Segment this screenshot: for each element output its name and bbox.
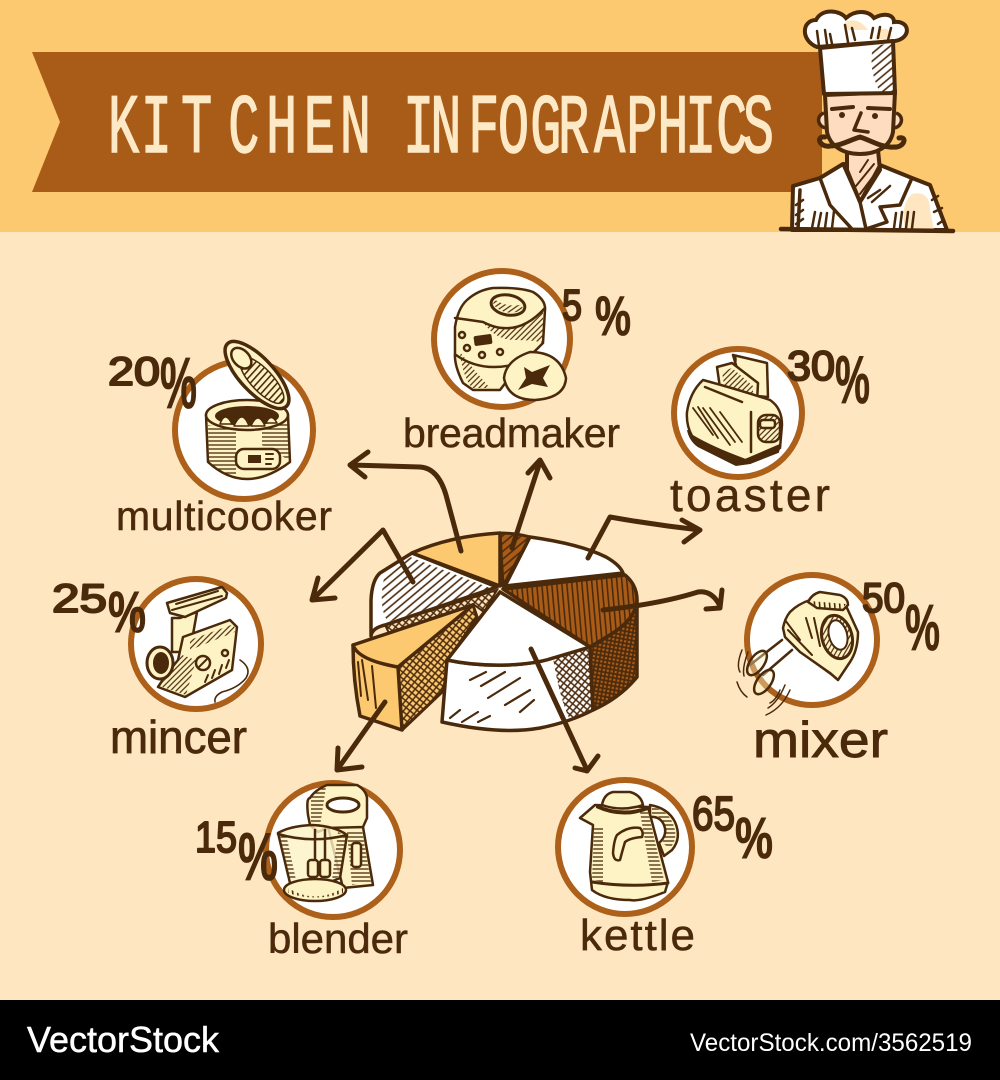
title ribbon xyxy=(32,52,822,192)
pie side: right dark xyxy=(590,600,637,710)
percent: 30%: % xyxy=(835,342,870,418)
chef baseline xyxy=(781,229,953,231)
pie side strokes xyxy=(450,672,534,722)
ring xyxy=(175,361,313,499)
pie small brown hatch xyxy=(500,533,530,586)
percent: 15%: % xyxy=(238,819,278,895)
icon: multicooker xyxy=(206,332,299,479)
percent: 65% xyxy=(692,788,773,871)
chef neck hatching xyxy=(856,160,878,194)
pie pulled piece side right xyxy=(398,605,477,730)
pie side hatching xyxy=(553,647,593,720)
pie side dark hatching xyxy=(590,600,637,710)
chef face xyxy=(825,92,895,154)
chef hat shading xyxy=(845,20,892,40)
pie slice hatching xyxy=(382,557,490,622)
ring xyxy=(131,579,261,709)
chef neck xyxy=(847,150,880,202)
pie inner gap xyxy=(385,590,497,635)
icon: mincer xyxy=(147,587,248,702)
arrow: to kettle xyxy=(531,649,598,771)
label: mincer: mincer xyxy=(110,711,247,763)
item: toaster xyxy=(674,349,802,477)
chef moustache xyxy=(820,137,904,147)
item: kettle xyxy=(558,780,692,914)
percent: 5% xyxy=(562,281,631,347)
chef hat puff xyxy=(805,12,907,47)
percent: 65%: % xyxy=(735,806,773,871)
percent: 15% xyxy=(195,813,278,895)
pie chart xyxy=(353,533,637,730)
arrow: to minced xyxy=(312,530,413,600)
percent: 15%: 15 xyxy=(195,813,237,862)
chef brows and eyes xyxy=(832,107,890,132)
arrow: to blender xyxy=(337,702,385,770)
percent: 5%: 5 xyxy=(562,281,582,330)
percent: 5%: % xyxy=(595,284,631,347)
icon: chef xyxy=(781,12,953,231)
ring xyxy=(674,349,802,477)
percent: 50%: % xyxy=(905,591,940,664)
item: mixer xyxy=(737,575,877,715)
ring xyxy=(266,783,400,917)
ring xyxy=(558,780,692,914)
ring xyxy=(434,271,570,407)
label: breadmaker: breadmaker xyxy=(403,410,620,456)
icon: mixer xyxy=(737,592,858,715)
footer logo text: VectorStock xyxy=(27,1019,220,1060)
footer url text: VectorStock.com/3562519 xyxy=(690,1029,972,1057)
pie slice: orange xyxy=(412,533,500,586)
arrow: to mixer xyxy=(603,590,722,610)
item: blender xyxy=(266,783,400,917)
percent: 30%: 30 xyxy=(787,342,835,389)
ring xyxy=(747,575,877,705)
percent: 20%: 20 xyxy=(108,350,160,394)
arrow: to multicooker xyxy=(350,452,461,551)
percent: 65%: 65 xyxy=(692,788,735,841)
pie pulled piece front xyxy=(353,645,402,730)
arrow: to toaster xyxy=(588,517,700,558)
pie side: front white xyxy=(442,647,593,730)
percent: 25%: 25 xyxy=(52,577,107,621)
pie slice: small brown xyxy=(500,533,530,586)
chef jacket strokes xyxy=(796,186,944,228)
chef hat folds xyxy=(817,25,891,46)
pie slice: striped white left xyxy=(371,553,497,636)
percent: 30% xyxy=(787,342,870,418)
percent: 25% xyxy=(52,577,146,645)
chef hat hatching xyxy=(872,43,894,92)
header band xyxy=(0,0,1000,232)
icon: toaster xyxy=(687,355,782,465)
pie slice: white front xyxy=(447,592,590,665)
item: breadmaker xyxy=(434,271,570,407)
footer bar xyxy=(0,1000,1000,1080)
label: toaster: toaster xyxy=(670,469,830,521)
pie brown hatching xyxy=(503,575,637,647)
percent: 50%: 50 xyxy=(862,574,905,621)
pie slice: top-right white xyxy=(505,537,623,586)
label: kettle: kettle xyxy=(580,911,695,960)
chef jacket stain xyxy=(904,193,934,229)
percent: 20%: % xyxy=(160,344,197,424)
pie pulled side hatch xyxy=(398,605,477,730)
label: multicooker: multicooker xyxy=(116,493,332,539)
item: multicooker xyxy=(175,332,313,499)
chef lapels xyxy=(798,164,912,229)
icon: kettle xyxy=(580,792,678,900)
pie pulled front strokes xyxy=(358,660,376,708)
percent: 50% xyxy=(862,574,940,664)
icon: blender xyxy=(278,785,373,901)
chef ears xyxy=(819,113,901,128)
item: mincer xyxy=(131,579,261,709)
pie slice: brown xyxy=(503,575,637,647)
label: blender: blender xyxy=(268,915,408,962)
pie pulled piece top xyxy=(353,605,473,667)
icon: bread xyxy=(504,352,566,400)
chef hat band xyxy=(820,41,895,94)
icon: breadmaker xyxy=(455,288,566,400)
title: KITCHEN INFOGRAPHICS xyxy=(108,82,774,177)
percent: 25%: % xyxy=(108,580,146,645)
arrow: to breadmaker xyxy=(512,460,550,548)
label: mixer: mixer xyxy=(753,712,888,768)
percent: 20% xyxy=(108,344,197,424)
chef jacket xyxy=(792,164,947,230)
